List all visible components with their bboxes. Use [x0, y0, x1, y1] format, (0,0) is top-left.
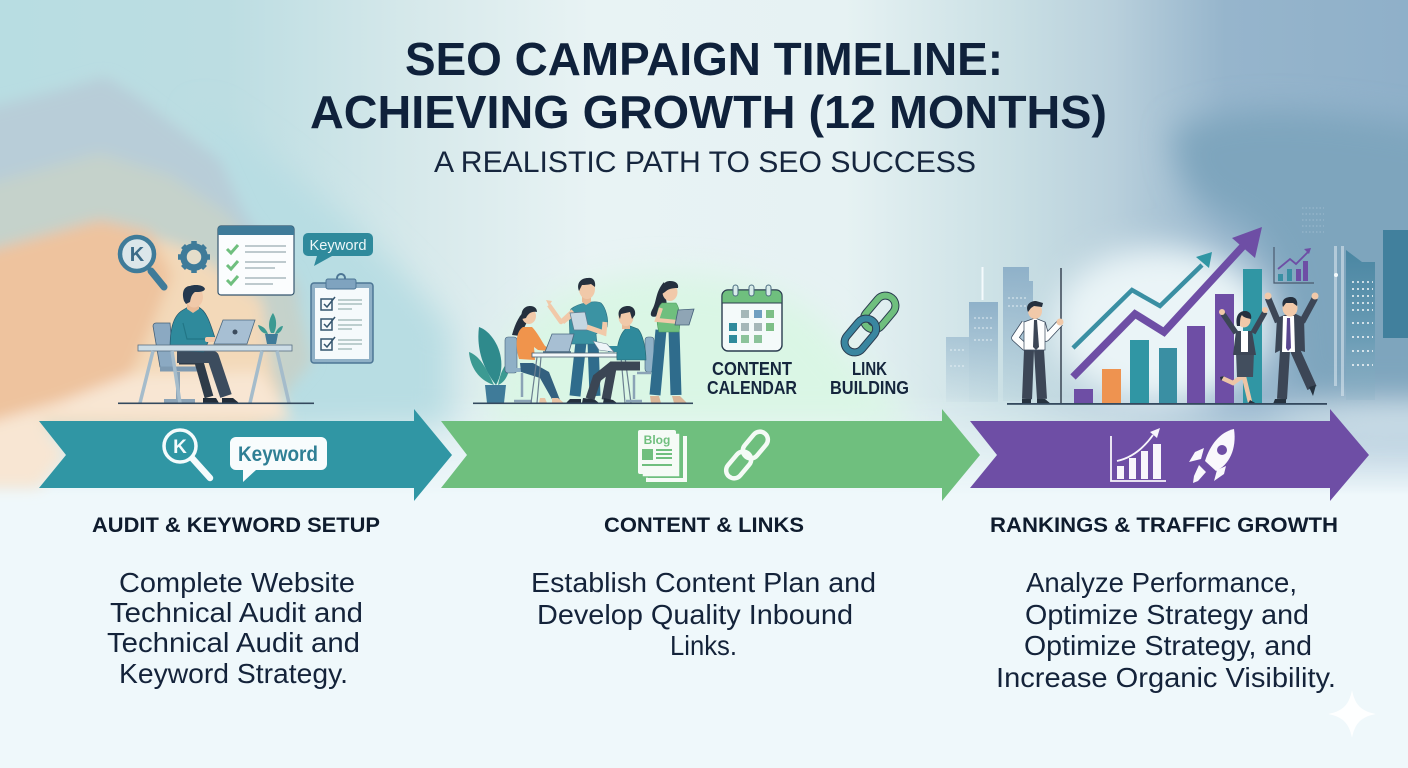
- background wash: [0, 0, 1408, 494]
- cheering woman: [1219, 307, 1268, 404]
- text block: content: Develop Quality Inbound: [537, 599, 853, 630]
- plant: [469, 327, 510, 403]
- icon: blog pages: [638, 430, 687, 482]
- text block: content: Links.: [670, 630, 737, 661]
- icon: mini chart: [1274, 247, 1314, 283]
- arrow: audit stage: [39, 409, 452, 501]
- cheering man: [1264, 292, 1318, 404]
- text block: content: Establish Content Plan and: [531, 567, 876, 598]
- subtitle: A REALISTIC PATH TO SEO SUCCESS: [434, 146, 976, 179]
- desk chair: [153, 323, 197, 401]
- table: [531, 353, 631, 403]
- heading: rankings: RANKINGS & TRAFFIC GROWTH: [990, 514, 1338, 537]
- laptop: [214, 320, 255, 344]
- label: link building: [830, 359, 909, 398]
- text block: content: [531, 567, 876, 661]
- text block: audit: [107, 567, 363, 689]
- icon: blog pages: Blog: [644, 433, 670, 447]
- text block: rankings: [996, 567, 1336, 693]
- desk: [118, 345, 314, 404]
- illustration: team meeting: [469, 278, 694, 404]
- illustration: audit desk scene: [118, 226, 373, 404]
- arrow: rankings stage: [970, 409, 1369, 501]
- city skyline backdrop: [946, 208, 1408, 402]
- label: link building: BUILDING: [830, 378, 909, 398]
- icon: white chain link: [723, 428, 771, 482]
- plant: [258, 313, 283, 344]
- label: content calendar: [707, 359, 797, 398]
- text block: rankings: Increase Organic Visibility.: [996, 662, 1336, 693]
- icon: keyword bubble: [303, 233, 373, 266]
- presenter: [1015, 268, 1064, 404]
- icon: white magnifier: K: [173, 437, 187, 458]
- icon: white keyword bubble: Keyword: [238, 443, 318, 466]
- text block: rankings: Optimize Strategy, and: [1024, 630, 1312, 661]
- person at laptop: [170, 285, 239, 403]
- illustration: growth chart: [1007, 227, 1327, 405]
- label: content calendar: CONTENT: [712, 359, 792, 379]
- icon: white keyword bubble: [230, 437, 327, 482]
- icon: white rocket: [1189, 429, 1235, 483]
- arrow: teal trend: [1073, 252, 1212, 348]
- arrow: purple trend: [1073, 227, 1262, 377]
- icon: content calendar: [722, 285, 782, 351]
- seated woman: [505, 306, 564, 403]
- label: content calendar: CALENDAR: [707, 378, 797, 398]
- seated man: [582, 306, 654, 403]
- text block: rankings: Analyze Performance,: [1026, 567, 1297, 598]
- icon: keyword bubble: Keyword: [310, 237, 366, 254]
- bar chart: [1074, 269, 1262, 404]
- text block: audit: Complete Website: [119, 567, 355, 598]
- text block: audit: Keyword Strategy.: [119, 658, 348, 689]
- text block: rankings: Optimize Strategy and: [1025, 599, 1309, 630]
- label: link building: LINK: [852, 359, 887, 379]
- icon: white growth chart: [1111, 428, 1166, 481]
- text block: audit: Technical Audit and: [110, 597, 363, 628]
- text block: audit: Technical Audit and: [107, 627, 360, 658]
- standing man: [546, 278, 608, 403]
- icon: chain link: [840, 292, 900, 356]
- icon: gear: [178, 241, 210, 273]
- icon: magnifier with K: K: [130, 244, 145, 266]
- heading: audit: AUDIT & KEYWORD SETUP: [92, 514, 380, 537]
- icon: clipboard: [311, 274, 373, 363]
- icon: checklist window: [218, 226, 294, 295]
- standing woman: [650, 281, 694, 403]
- laptop: [543, 334, 574, 352]
- arrow: content stage: [441, 409, 980, 501]
- title: [310, 33, 1107, 138]
- title: SEO CAMPAIGN TIMELINE:: [405, 33, 1003, 85]
- icon: sparkle: [1328, 690, 1376, 738]
- title: ACHIEVING GROWTH (12 MONTHS): [310, 86, 1107, 138]
- icon: white magnifier: [164, 430, 210, 478]
- heading: content: CONTENT & LINKS: [604, 514, 804, 537]
- icon: magnifier with K: [120, 237, 164, 287]
